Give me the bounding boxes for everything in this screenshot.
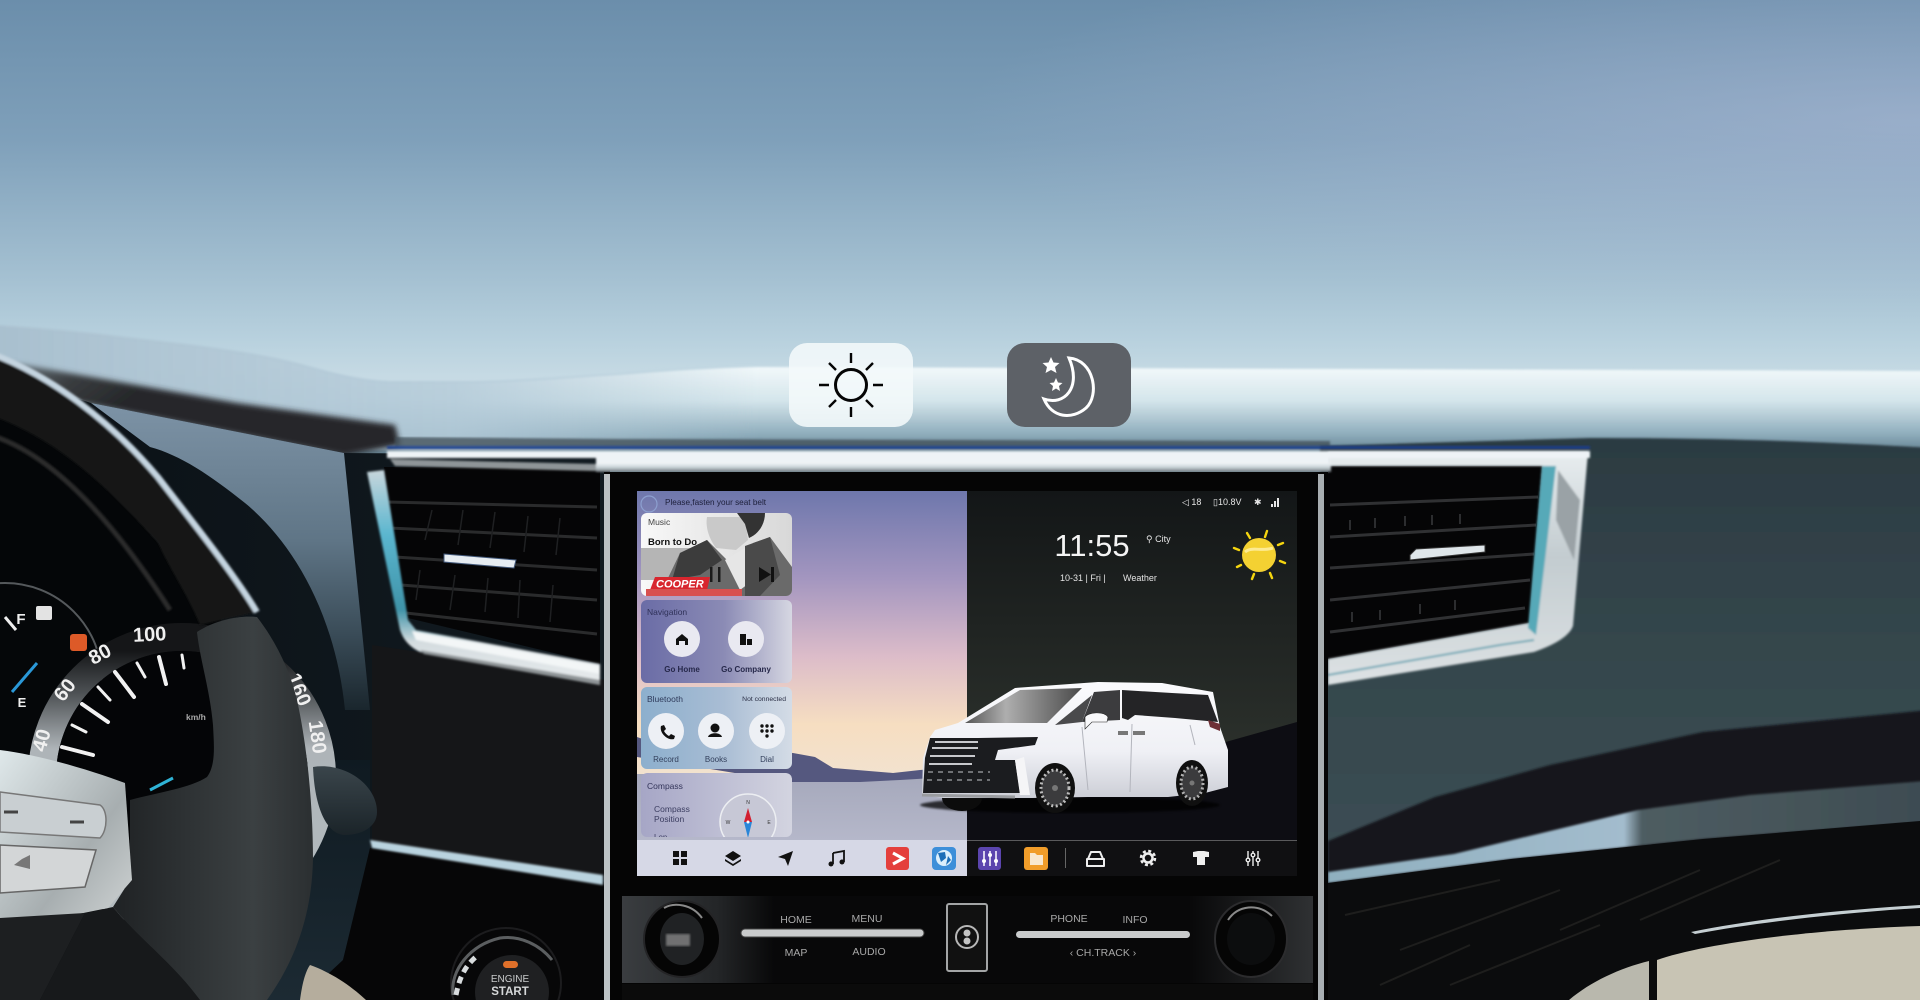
- glove box grey panel: [1569, 961, 1649, 1000]
- right gloss strip: [1328, 779, 1920, 883]
- glove box cream panel: [1657, 926, 1920, 1000]
- front grille: [922, 737, 1038, 797]
- volume status: ◁ 18: [1182, 497, 1201, 507]
- steering column stalk: [313, 766, 377, 835]
- seat belt message: Please,fasten your seat belt: [665, 498, 767, 507]
- button: Record: Record: [653, 755, 679, 764]
- button labels: MAP: [785, 947, 807, 959]
- button labels: PHONE: [1050, 913, 1088, 925]
- button: Go Home: [664, 621, 700, 674]
- button: Dial: [749, 713, 785, 764]
- right upper dark trim: [1328, 708, 1920, 1000]
- button labels: ‹ CH.TRACK ›: [1070, 947, 1137, 959]
- fuel gauge: [0, 583, 102, 777]
- button: Go Home: Go Home: [664, 665, 700, 674]
- compass dial: W: [726, 820, 731, 826]
- button labels: INFO: [1122, 914, 1148, 926]
- engine indicator lamp: [503, 961, 518, 968]
- lower column shadow: [40, 907, 200, 1000]
- left control bar: [741, 929, 924, 937]
- door lines: [1082, 724, 1195, 792]
- rear windows: [1122, 690, 1218, 722]
- control panel under screen: [622, 896, 1313, 1000]
- front side window: [1055, 695, 1092, 725]
- button labels: HOME: [780, 914, 812, 926]
- right dashboard body: [1320, 438, 1920, 1000]
- icon: fuel pump: [36, 606, 52, 620]
- button: Books: [698, 713, 734, 764]
- text: Compass Position: Compass: [654, 804, 690, 814]
- right highlight strip: [1691, 905, 1920, 934]
- dashboard underside shadow band: [0, 360, 400, 456]
- dashboard top surface: [0, 327, 1920, 520]
- text: Music: Music: [648, 517, 671, 527]
- engine start button: START: [491, 986, 529, 998]
- left vent chrome frame: [367, 470, 600, 685]
- icon: crescent moon and stars: [1042, 357, 1093, 415]
- seat belt message: [641, 496, 767, 512]
- icon: video app: [886, 847, 909, 870]
- left air vent: [384, 467, 600, 664]
- icon: layers: [725, 851, 741, 866]
- compass dial: [719, 793, 777, 837]
- engine start button: ENGINE: [491, 974, 529, 985]
- lower dark trim: [0, 913, 85, 1000]
- icon: sun: [819, 353, 883, 417]
- steering wheel rim: [0, 353, 257, 625]
- icon: apps grid: [673, 851, 687, 865]
- text: connection state: Not connected: [742, 696, 786, 703]
- bluetooth card: [641, 687, 792, 769]
- head unit bezel: [604, 472, 1328, 1000]
- instrument pod: [0, 410, 320, 1000]
- navigation card: [641, 600, 792, 683]
- hazard badge: [947, 904, 987, 971]
- front wheel: [1035, 763, 1075, 813]
- text: Bluetooth: Bluetooth: [647, 694, 683, 704]
- pause icon: [710, 567, 720, 582]
- icon: fuel warning: [70, 634, 87, 651]
- compass card: [641, 773, 792, 837]
- left knob: [644, 901, 720, 977]
- compass dial: N: [746, 800, 750, 806]
- van body: [922, 682, 1228, 798]
- date line: 10-31 | Fri |: [1060, 573, 1106, 583]
- left lower panel: [372, 645, 605, 880]
- next icon: [759, 567, 774, 582]
- button: Go Company: [721, 621, 771, 674]
- text: speed unit: km/h: [186, 712, 206, 722]
- right air vent: [1328, 466, 1542, 659]
- head unit screen: [637, 491, 1297, 876]
- button: Go Company: Go Company: [721, 665, 771, 674]
- navy area right of wheel: [260, 760, 370, 1000]
- dock divider: [1065, 848, 1066, 868]
- text: Compass: Compass: [647, 781, 683, 791]
- icon: settings gear: [1141, 851, 1155, 865]
- button labels: AUDIO: [852, 946, 886, 958]
- wood trim lower left: [300, 848, 605, 1000]
- fuel gauge: F: [16, 611, 26, 628]
- icon: navigation arrow: [778, 851, 793, 866]
- wheel button top: [0, 792, 106, 838]
- mirror: [1085, 713, 1108, 729]
- compass dial: E: [767, 820, 771, 826]
- icon: shirt: [1193, 851, 1209, 865]
- speedometer: 60: [50, 675, 81, 706]
- text: Navigation: Navigation: [647, 607, 687, 617]
- sky background: [0, 0, 1920, 400]
- icon: equalizer app: [978, 847, 1001, 870]
- speedometer: 40: [29, 727, 56, 754]
- icon: voice glyph: [14, 855, 30, 869]
- wheel button bottom: [0, 845, 96, 893]
- speedometer: 80: [85, 640, 115, 670]
- text: Lon: Lon: [654, 833, 667, 842]
- cream seat lower left: [300, 965, 366, 1000]
- night mode wallpaper: [967, 491, 1297, 876]
- album logo: COOPER: [656, 578, 704, 590]
- steering wheel silver hub: [0, 750, 132, 1000]
- door window: [1082, 690, 1120, 722]
- speedometer: [29, 623, 330, 917]
- blue-grey panel beside wheel: [91, 403, 370, 710]
- right control bar: [1016, 931, 1190, 938]
- icon: sliders: [1246, 851, 1260, 866]
- speedometer: 180: [304, 719, 330, 755]
- icon: phone glyph: [4, 812, 84, 822]
- far front wheel: [942, 785, 982, 811]
- tail light: [1208, 720, 1220, 731]
- right knob: [1215, 901, 1287, 977]
- right vent chrome frame: [1328, 452, 1588, 685]
- speedometer: 100: [132, 623, 167, 647]
- bluetooth status: ✱: [1254, 497, 1262, 507]
- dock bar: [637, 840, 1297, 876]
- weather label: Weather: [1123, 573, 1157, 583]
- left hood tint: [0, 325, 760, 450]
- door handles: [1118, 731, 1145, 735]
- music card: [641, 513, 792, 596]
- windshield: [965, 688, 1082, 723]
- icon: weather sun: [1234, 531, 1285, 579]
- right wood trim: [1328, 821, 1920, 1000]
- icon: browser app: [932, 847, 956, 870]
- left dashboard base: [0, 370, 610, 1000]
- button: Dial: Dial: [760, 755, 774, 764]
- light mode button: [789, 343, 913, 427]
- button labels: MENU: [852, 913, 882, 925]
- text: Compass Position: Position: [654, 814, 685, 824]
- icon: music note: [828, 851, 844, 866]
- chrome strip lower left: [370, 840, 603, 885]
- button: Record: [648, 713, 684, 764]
- dark mode button: [1007, 343, 1131, 427]
- icon: car: [1087, 852, 1104, 866]
- icon: files app: [1024, 847, 1048, 870]
- day mode wallpaper: [637, 491, 967, 876]
- top chrome trim: [387, 446, 1590, 472]
- signal status: [1271, 498, 1279, 507]
- minivan illustration: [920, 682, 1228, 813]
- speedometer: 160: [282, 670, 315, 709]
- ground shadow: [920, 797, 1220, 813]
- album logo: [646, 577, 742, 596]
- button labels: [780, 913, 1148, 959]
- dashboard lower lip: [395, 437, 1330, 447]
- voltage status: ▯10.8V: [1213, 497, 1241, 507]
- status bar: [1182, 497, 1279, 507]
- button: Books: Books: [705, 755, 727, 764]
- text: song title: Born to Do: [648, 537, 697, 548]
- fuel gauge: E: [18, 695, 27, 710]
- rear wheel: [1176, 760, 1208, 806]
- city label: ⚲ City: [1146, 534, 1171, 544]
- clock: 11:55: [1054, 528, 1130, 563]
- engine start button: [451, 928, 561, 1000]
- steering wheel leather spoke: [113, 617, 313, 1000]
